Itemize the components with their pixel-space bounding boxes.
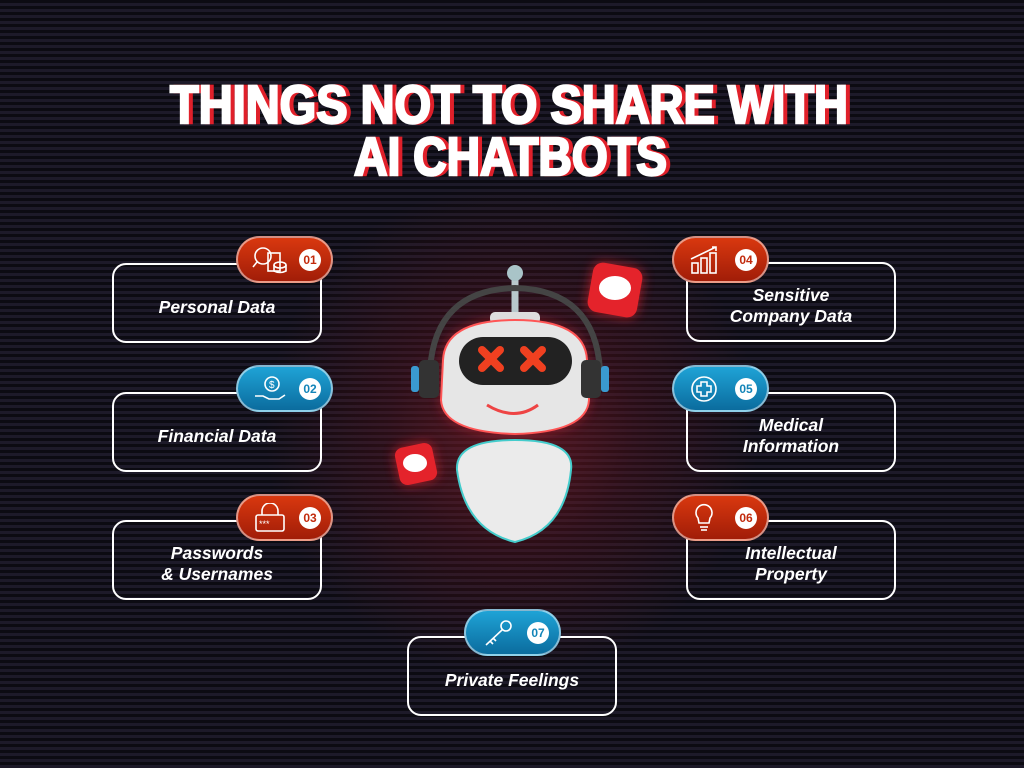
box: medical information: Medical [759, 415, 823, 435]
box: financial data: Financial Data [158, 426, 276, 446]
pill 03 [236, 494, 333, 541]
title: AI CHATBOTS [354, 127, 667, 187]
pill 05: 05 [739, 382, 753, 396]
item 01 [112, 236, 333, 343]
pill 03: 03 [303, 511, 317, 525]
box: personal data: Personal Data [159, 296, 275, 316]
pill 05 [672, 365, 769, 412]
pill 02 [236, 365, 333, 412]
box: passwords: Passwords [171, 543, 263, 563]
pill 04: 04 [739, 253, 753, 267]
box: medical information [686, 392, 896, 472]
box: passwords: & Usernames [161, 564, 273, 584]
pill 02: $ [269, 380, 275, 390]
title: AI CHATBOTS [358, 127, 671, 187]
title: THINGS NOT TO SHARE WITH [170, 75, 848, 135]
box: personal data [112, 263, 322, 343]
box: intellectual property: Intellectual [745, 543, 837, 563]
chat bubble top right [586, 261, 644, 319]
box: medical information: Information [743, 436, 839, 456]
pill 06 [672, 494, 769, 541]
box: private feelings: Private Feelings [445, 670, 579, 690]
item 02 [112, 365, 333, 472]
item 03 [112, 494, 333, 600]
title [169, 75, 852, 187]
box: sensitive company data [686, 262, 896, 342]
item 05 [672, 365, 896, 472]
pill 04 [672, 236, 769, 283]
box: intellectual property [686, 520, 896, 600]
item 04 [672, 236, 896, 342]
box: private feelings [407, 636, 617, 716]
box: financial data [112, 392, 322, 472]
pill 03: *** [259, 518, 270, 528]
box: sensitive company data: Company Data [730, 306, 852, 326]
item 07 [407, 609, 617, 716]
pill 06: 06 [739, 511, 753, 525]
pill 07: 07 [531, 626, 545, 640]
robot illustration [388, 254, 650, 543]
pill 07 [464, 609, 561, 656]
pill 02: 02 [303, 382, 317, 396]
pill 01 [236, 236, 333, 283]
chat bubble bottom left [393, 441, 439, 487]
box: passwords [112, 520, 322, 600]
box: intellectual property: Property [755, 564, 827, 584]
pill 01: 01 [303, 253, 317, 267]
title: THINGS NOT TO SHARE WITH [174, 75, 852, 135]
item 06 [672, 494, 896, 600]
box: sensitive company data: Sensitive [753, 285, 829, 305]
